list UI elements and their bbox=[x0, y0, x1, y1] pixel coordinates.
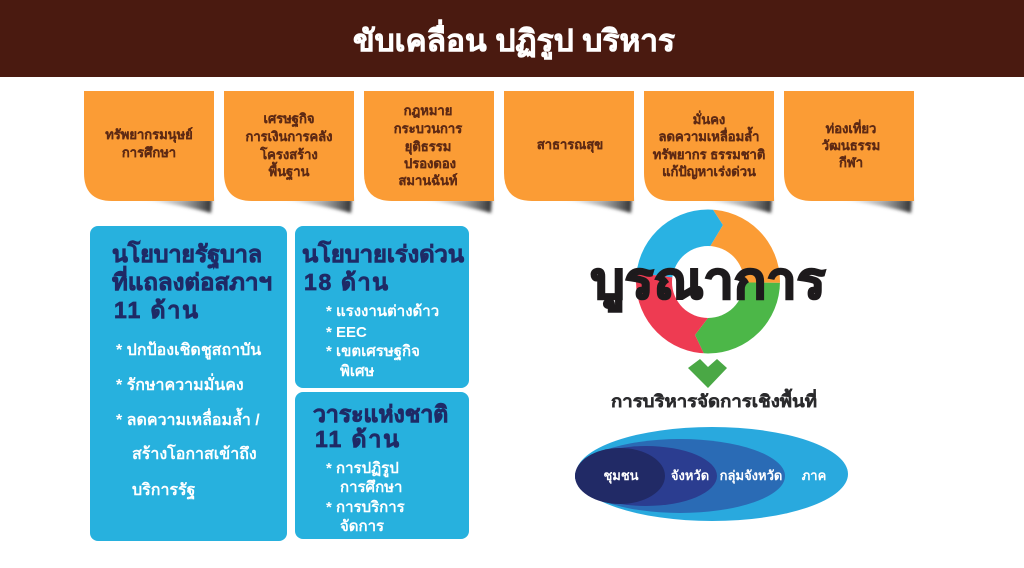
sticky note 3: กฎหมาย bbox=[404, 103, 452, 119]
sticky note 2: พื้นฐาน bbox=[269, 161, 310, 181]
sticky note 1: ทรัพยากรมนุษย์ bbox=[105, 127, 193, 143]
sticky note 2 bbox=[224, 91, 354, 213]
sticky note 5: แก้ปัญหาเร่งด่วน bbox=[662, 164, 756, 180]
heading: government policy: ที่แถลงต่อสภาฯ bbox=[112, 265, 272, 295]
sticky note 2: เศรษฐกิจ bbox=[264, 111, 314, 128]
sticky note 1 bbox=[84, 91, 214, 213]
heading: national agenda: วาระแห่งชาติ bbox=[313, 401, 448, 427]
sticky note 3: ยุติธรรม bbox=[405, 139, 451, 155]
sticky note 4 bbox=[504, 91, 634, 213]
ring hole bbox=[672, 246, 744, 318]
ellipse: community bbox=[575, 448, 665, 504]
title banner: ขับเคลื่อน ปฏิรูป บริหาร bbox=[353, 19, 675, 60]
diagram: nested area ellipses bbox=[575, 427, 848, 521]
list: urgent policy items: * แรงงานต่างด้าว bbox=[326, 303, 439, 320]
sticky note 2: การเงินการคลัง bbox=[246, 129, 332, 144]
label: region: ภาค bbox=[802, 468, 826, 483]
ring segment: orange bbox=[710, 210, 780, 283]
ellipse: province cluster bbox=[575, 439, 785, 513]
panel: sticky note categories bbox=[84, 91, 914, 213]
sticky note 3: สมานฉันท์ bbox=[398, 173, 458, 188]
sticky note 6: วัฒนธรรม bbox=[822, 138, 880, 153]
sticky note 6: ท่องเที่ยว bbox=[826, 119, 876, 136]
icon: green down arrow bbox=[688, 359, 727, 388]
ring segment: green bbox=[695, 282, 780, 354]
sticky note 5: มั่นคง bbox=[693, 110, 725, 127]
sticky note 1: การศึกษา bbox=[122, 145, 176, 160]
list: urgent policy items: * EEC bbox=[326, 324, 367, 341]
panel: national agenda bbox=[295, 392, 469, 539]
label: province: จังหวัด bbox=[671, 468, 709, 483]
sticky note 3: ปรองดอง bbox=[404, 156, 456, 171]
diagram: integration ring bbox=[590, 205, 826, 360]
title banner bbox=[0, 0, 1024, 77]
label: community: ชุมชน bbox=[603, 468, 639, 484]
panel: government policy bbox=[90, 226, 287, 541]
label: province cluster: กลุ่มจังหวัด bbox=[720, 468, 782, 484]
heading: urgent policy: นโยบายเร่งด่วน bbox=[302, 240, 464, 267]
sticky note 4: สาธารณสุข bbox=[537, 137, 603, 153]
heading: government policy: 11 ด้าน bbox=[114, 297, 198, 323]
list: national agenda items: การศึกษา bbox=[340, 478, 402, 496]
list: national agenda items: จัดการ bbox=[340, 518, 385, 535]
sticky note 5: ทรัพยากร ธรรมชาติ bbox=[653, 147, 765, 162]
panel: urgent policy bbox=[295, 226, 469, 388]
sticky note 6 bbox=[784, 91, 914, 213]
list: government policy items: สร้างโอกาสเข้าถึง bbox=[132, 443, 257, 463]
ring segment: blue bbox=[637, 210, 723, 278]
heading: area-based management: การบริหารจัดการเชิงพื้นที่ bbox=[611, 388, 817, 411]
ellipse: province bbox=[575, 446, 717, 506]
sticky note 3: กระบวนการ bbox=[394, 121, 462, 136]
sticky note 2: โครงสร้าง bbox=[259, 146, 318, 162]
list: government policy items: * ลดความเหลื่อมล้ำ / bbox=[116, 407, 260, 429]
sticky note 6: กีฬา bbox=[839, 155, 863, 170]
heading: government policy: นโยบายรัฐบาล bbox=[112, 240, 262, 269]
list: urgent policy items: พิเศษ bbox=[340, 362, 375, 380]
list: urgent policy items: * เขตเศรษฐกิจ bbox=[326, 342, 420, 361]
list: national agenda items: * การปฏิรูป bbox=[326, 459, 399, 478]
list: government policy items: * รักษาความมั่นคง bbox=[116, 373, 244, 394]
ring segment: red bbox=[636, 274, 708, 354]
heading: integration word: บูรณาการ bbox=[590, 253, 826, 312]
list: government policy items: * ปกป้องเชิดชูสถาบัน bbox=[116, 341, 261, 361]
heading: national agenda: 11 ด้าน bbox=[315, 426, 399, 452]
sticky note 3 bbox=[364, 91, 494, 213]
heading: urgent policy: 18 ด้าน bbox=[304, 269, 388, 295]
sticky note 5: ลดความเหลื่อมล้ำ bbox=[659, 126, 759, 144]
list: government policy items: บริการรัฐ bbox=[132, 481, 196, 500]
list: national agenda items: * การบริการ bbox=[326, 498, 406, 516]
ellipse: region bbox=[576, 427, 848, 521]
sticky note 5 bbox=[644, 91, 774, 213]
